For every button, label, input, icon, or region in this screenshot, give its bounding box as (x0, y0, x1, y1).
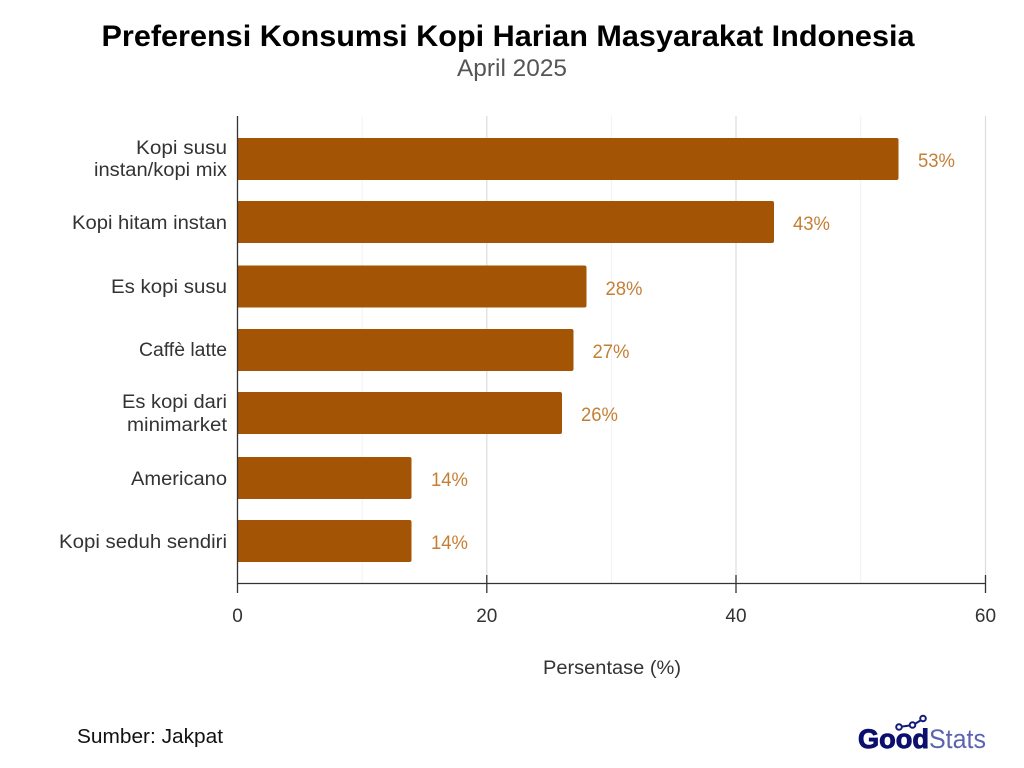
bar: Es kopi susu (111, 266, 643, 308)
bar: Kopi susu instan/kopi mix: 53% (918, 151, 955, 172)
horizontal axis with ticks (237, 575, 986, 593)
axis tick labels: 20 (476, 606, 497, 627)
bar: Es kopi dari minimarket: Es kopi dari (122, 392, 227, 413)
bar: Caffè latte: Caffè latte (139, 340, 227, 361)
bar chart (59, 116, 996, 679)
bar: Es kopi dari minimarket: 26% (581, 405, 618, 426)
logo: GoodStats (858, 716, 986, 754)
title: Preferensi Konsumsi Kopi Harian Masyarakat Indonesia (102, 20, 915, 53)
bar: Kopi seduh sendiri: Kopi seduh sendiri (59, 532, 227, 553)
axis tick labels: 40 (725, 606, 747, 627)
bar: Caffè latte: 27% (592, 342, 630, 363)
bar: Kopi hitam instan (72, 201, 830, 243)
bar: Americano: Americano (131, 469, 227, 490)
axis tick labels: 60 (975, 606, 996, 627)
bar: Kopi seduh sendiri: 14% (431, 533, 468, 554)
bar: Kopi susu instan/kopi mix (94, 138, 955, 181)
bar: Es kopi dari minimarket (122, 392, 618, 436)
axis tick labels (232, 606, 996, 627)
bar: Kopi seduh sendiri (59, 520, 468, 562)
subtitle: April 2025 (457, 55, 567, 82)
axis title: Persentase (%) (543, 658, 681, 679)
vertical axis (236, 116, 238, 593)
bar: Es kopi susu: Es kopi susu (111, 277, 227, 298)
logo: GoodStats: Good (858, 724, 929, 754)
bar: Americano: 14% (431, 470, 468, 491)
source: Sumber: Jakpat (77, 726, 223, 748)
gridlines (362, 116, 986, 584)
bar: Americano (131, 457, 468, 499)
bar: Kopi hitam instan: Kopi hitam instan (72, 213, 227, 234)
bar: Es kopi susu: 28% (606, 279, 643, 300)
bar: Kopi susu instan/kopi mix: instan/kopi mix (94, 160, 228, 181)
logo trend line icon (896, 716, 926, 730)
bar: Kopi susu instan/kopi mix: Kopi susu (136, 138, 227, 159)
bar: Caffè latte (139, 329, 630, 371)
bar: Es kopi dari minimarket: minimarket (127, 415, 228, 436)
axis tick labels: 0 (232, 606, 243, 627)
bar: Kopi hitam instan: 43% (793, 214, 830, 235)
logo: GoodStats: Stats (929, 724, 986, 754)
